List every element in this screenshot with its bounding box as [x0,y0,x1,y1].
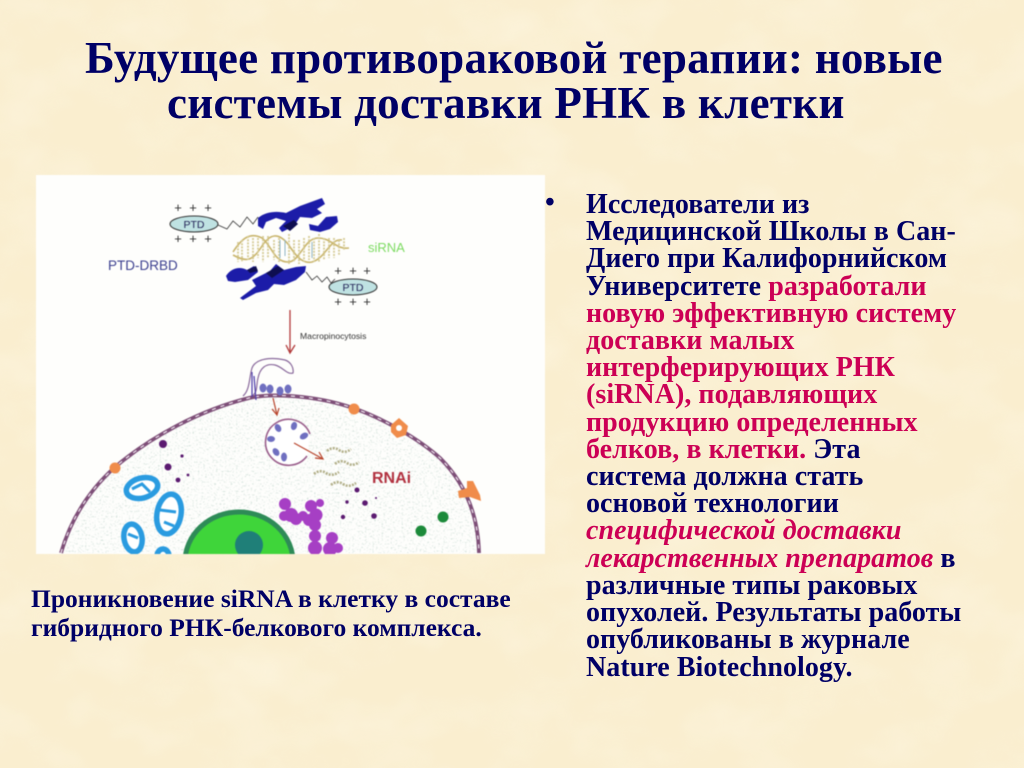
title: системы доставки РНК в клетки [167,78,845,128]
body text: Диего при Калифорнийском [586,243,947,274]
endoplasmic reticulum [279,498,343,556]
body text: белков, в клетки. Эта [586,434,861,465]
lower PTD domain: + [363,263,371,278]
label: PTD-DRBD: PTD-DRBD [108,258,178,273]
membrane receptors [110,404,481,501]
cell membrane [61,395,479,553]
nucleus [185,512,293,612]
lower protein ribbon [226,264,306,300]
body text: продукцию определенных [586,407,918,438]
caption: Проникновение siRNA в клетку в составе [31,584,511,613]
upper PTD domain: PTD [184,219,205,231]
upper PTD domain: + [174,200,182,215]
body text: опубликованы в журнале [586,624,910,655]
cell cytoplasm speckle [61,393,479,554]
released siRNA strands [314,448,359,486]
body text: (siRNA), подавляющих [586,379,877,410]
body text: специфической доставки [586,515,902,546]
upper PTD domain: + [204,231,212,246]
body text: опухолей. Результаты работы [586,597,961,628]
siRNA double helix [233,234,349,264]
caption [31,584,511,642]
endosome with particles [266,419,310,465]
label: RNAi: RNAi [372,470,411,487]
body text: различные типы раковых [586,570,917,601]
body text: Медицинской Школы в Сан- [586,216,956,247]
caption: гибридного РНК-белкового комплекса. [31,613,482,642]
arrow: macropinocytosis [286,310,295,353]
body text: новую эффективную систему [586,298,956,329]
internalised particles [260,384,292,396]
label: Macropinocytosis: Macropinocytosis [300,331,366,341]
lower PTD domain: PTD [342,282,364,294]
arrow: release of siRNA [294,443,323,459]
upper PTD domain [170,200,258,246]
label: siRNA: siRNA [368,240,405,255]
upper PTD domain: + [204,200,212,215]
lower PTD domain: + [349,263,357,278]
green vesicles [416,512,448,536]
body text: Nature Biotechnology. [586,652,853,683]
body text: основой технологии [586,488,839,519]
body text: доставки малых [586,325,794,356]
title: Будущее противораковой терапии: новые [85,33,943,83]
upper protein ribbon [258,198,338,232]
upper PTD domain: + [174,231,182,246]
title [85,33,943,128]
lower PTD domain: + [334,294,342,309]
membrane ruffle (macropinocytosis) [243,359,293,400]
arrow into cell [272,398,279,415]
mitochondria [122,474,184,563]
body text: Исследователи из [586,189,809,220]
lower PTD domain: + [334,263,342,278]
lower PTD domain [306,263,377,309]
body text: Университете разработали [586,271,927,302]
diagram: siRNA delivery into a cell [36,174,546,555]
body text: лекарственных препаратов в [586,543,956,574]
lower PTD domain: + [349,294,357,309]
body text: система должна стать [586,461,863,492]
upper PTD domain: + [189,231,197,246]
dark purple granules [159,440,377,519]
body text [585,189,961,683]
body text: интерферирующих РНК [586,352,895,383]
upper PTD domain: + [189,200,197,215]
bullet: • [545,187,555,218]
lower PTD domain: + [363,294,371,309]
